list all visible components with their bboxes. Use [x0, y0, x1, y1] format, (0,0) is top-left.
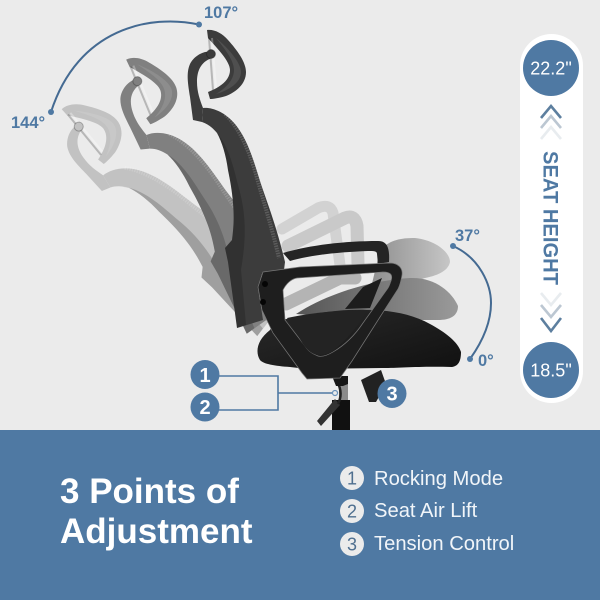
seat cushion — [257, 310, 461, 369]
arc: headrest angle — [48, 21, 202, 115]
list item: seat air lift: 2 — [347, 502, 357, 522]
label: 37 degrees: 37° — [455, 227, 480, 245]
callout 3: 3 — [386, 384, 398, 406]
callout 1: 1 — [199, 365, 211, 387]
list item: tension control: Tension Control — [374, 533, 514, 555]
seat visible through arm — [287, 310, 367, 355]
callout 2 — [190, 392, 220, 422]
callout 2: 2 — [199, 397, 211, 419]
top value: 22.2 inches: 22.2" — [530, 58, 572, 78]
arc: seat tilt angle — [450, 243, 491, 362]
list item: seat air lift: Seat Air Lift — [374, 500, 478, 522]
gas lift column — [317, 376, 350, 430]
chair illustration — [46, 30, 461, 430]
heading: Adjustment — [60, 512, 253, 551]
up chevrons — [541, 106, 561, 139]
ghost armrest: reclined positions — [282, 206, 358, 304]
tension control knob — [361, 370, 386, 402]
list item: tension control: 3 — [347, 534, 357, 554]
label: 0 degrees: 0° — [478, 352, 494, 370]
connector ring — [332, 390, 338, 396]
rear armrest — [283, 241, 389, 264]
seat height pill — [520, 34, 583, 403]
seat height label: SEAT HEIGHT — [538, 151, 562, 285]
bottom panel — [0, 430, 600, 600]
ghost seat: middle position — [296, 278, 458, 320]
list item: rocking mode: Rocking Mode — [374, 468, 503, 490]
label: 107 degrees: 107° — [204, 4, 238, 22]
arm strut — [345, 278, 382, 309]
down chevrons — [541, 293, 561, 331]
front armrest — [258, 263, 402, 379]
callout 1 — [190, 360, 220, 389]
list item: rocking mode: 1 — [347, 468, 357, 488]
list item: seat air lift — [340, 499, 478, 523]
top value: 22.2 inches — [523, 40, 579, 96]
chair back and headrest: 107 degree position — [188, 30, 285, 328]
heading: 3 Points of — [60, 472, 239, 511]
ghost chair back: middle position — [108, 35, 292, 349]
bottom value: 18.5 inches — [523, 342, 579, 398]
ghost chair back: 144 degree position — [46, 64, 297, 364]
ghost seat: fully reclined position — [370, 238, 450, 292]
arm pivot holes — [260, 281, 268, 305]
label: 144 degrees: 144° — [11, 114, 45, 132]
bottom value: 18.5 inches: 18.5" — [530, 360, 572, 380]
callout connector lines — [215, 376, 333, 410]
callout 3 — [378, 379, 406, 408]
